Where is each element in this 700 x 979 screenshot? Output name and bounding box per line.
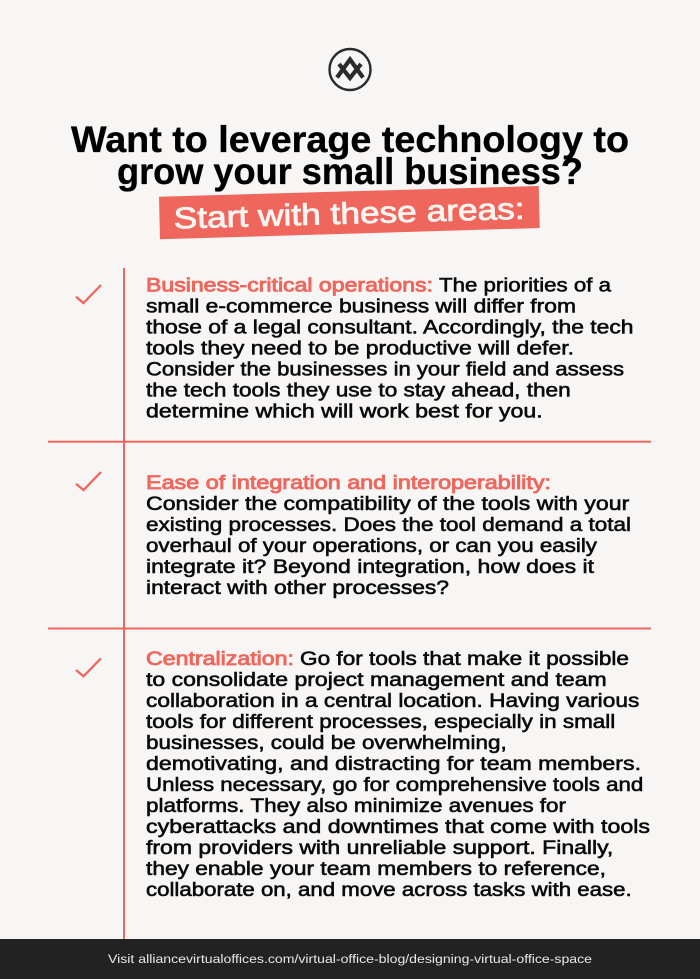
text block: centralization: Unless necessary, go for comprehensive tools and xyxy=(146,774,643,796)
text block: centralization: collaborate on, and move across tasks with ease. xyxy=(146,879,632,901)
title: grow your small business? xyxy=(117,151,583,192)
text block: business-critical operations: determine which will work best for you. xyxy=(146,401,543,423)
text block: ease of integration: Ease of integration and interoperability: xyxy=(146,472,551,494)
text block: business-critical operations: the tech tools they use to stay ahead, then xyxy=(146,380,571,402)
text block: business-critical operations: The priorities of a xyxy=(439,275,611,297)
text block: ease of integration: Consider the compatibility of the tools with your xyxy=(146,493,630,515)
text block: centralization: businesses, could be overwhelming, xyxy=(146,732,507,754)
text block: centralization: they enable your team members to reference, xyxy=(146,858,606,880)
title xyxy=(71,119,629,192)
icon: checkmark xyxy=(76,285,101,303)
text block: centralization: Centralization: xyxy=(146,648,294,670)
panel: ease of integration and interoperability xyxy=(76,472,631,599)
text block: business-critical operations: small e-commerce business will differ from xyxy=(146,296,576,318)
text block: business-critical operations: Business-critical operations: xyxy=(146,275,433,297)
text block: business-critical operations: Consider the businesses in your field and assess xyxy=(146,359,624,381)
text block: centralization: to consolidate project management and team xyxy=(146,669,607,691)
title: Want to leverage technology to xyxy=(71,119,629,160)
text block: ease of integration xyxy=(146,472,631,599)
text block: centralization: tools for different processes, especially in small xyxy=(146,711,615,733)
text block: ease of integration: overhaul of your operations, or can you easily xyxy=(146,535,597,557)
text block: centralization: from providers with unreliable support. Finally, xyxy=(146,837,613,859)
text block: ease of integration: existing processes. Does the tool demand a total xyxy=(146,514,631,536)
panel: business-critical operations xyxy=(76,275,634,423)
text block: centralization: platforms. They also minimize avenues for xyxy=(146,795,567,817)
footer bar: Visit alliancevirtualoffices.com/virtual-office-blog/designing-virtual-office-space xyxy=(108,952,592,966)
text block: business-critical operations: tools they need to be productive will defer. xyxy=(146,338,574,360)
text block: centralization: collaboration in a central location. Having various xyxy=(146,690,639,712)
text block: ease of integration: interact with other processes? xyxy=(146,577,449,599)
text block: centralization xyxy=(146,648,650,901)
text block: business-critical operations: those of a legal consultant. Accordingly, the tech xyxy=(146,317,634,339)
icon: checkmark xyxy=(76,472,101,490)
icon: checkmark xyxy=(76,658,101,676)
panel: centralization xyxy=(76,648,650,901)
icon: company logo xyxy=(330,49,370,90)
text block: centralization: cyberattacks and downtimes that come with tools xyxy=(146,816,650,838)
subtitle badge xyxy=(159,186,540,239)
text block: ease of integration: integrate it? Beyond integration, how does it xyxy=(146,556,595,578)
text block: centralization: demotivating, and distracting for team members. xyxy=(146,753,641,775)
text block: centralization: Go for tools that make it possible xyxy=(300,648,629,670)
footer bar xyxy=(0,939,700,979)
subtitle badge: Start with these areas: xyxy=(173,193,525,235)
text block: business-critical operations xyxy=(146,275,634,423)
